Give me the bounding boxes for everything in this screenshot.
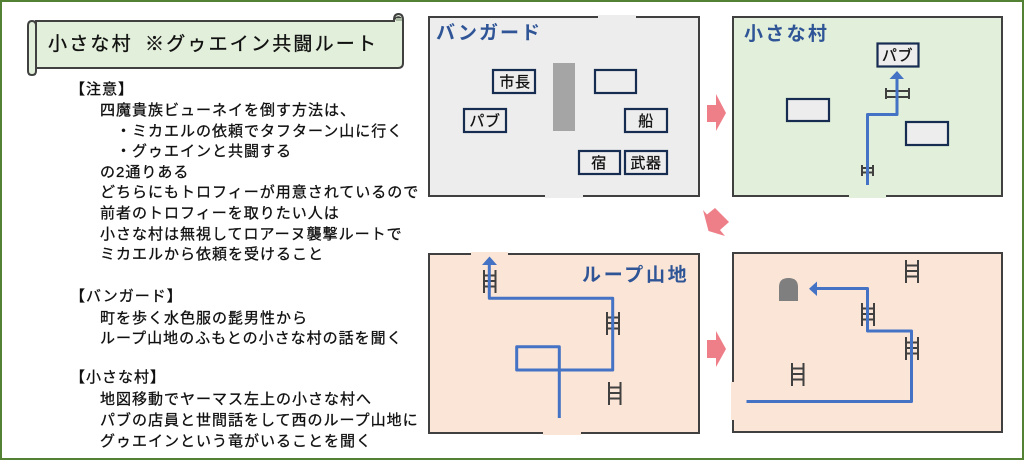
building: blank xyxy=(595,70,636,93)
ladder: top left xyxy=(484,270,496,293)
ladder: lower xyxy=(862,165,873,176)
text: caution body: の2通りある xyxy=(100,164,189,181)
route xyxy=(746,282,912,402)
ladder: right xyxy=(607,312,619,335)
text: caution body: どちらにもトロフィーが用意されているので xyxy=(100,184,419,201)
text: Vanguard body: 町を歩く水色服の髭男性から xyxy=(100,310,308,326)
panel: cave approach map xyxy=(731,253,1002,432)
text: caution body: 小さな村は無視してロアーヌ襲撃ルートで xyxy=(100,226,403,243)
building: mayor xyxy=(493,70,535,93)
title banner: 小さな村 xyxy=(48,34,133,55)
building: blank right xyxy=(906,122,948,145)
arrow: Vanguard to small village xyxy=(707,94,726,131)
arrow: small village to Loop mountains xyxy=(703,208,729,236)
building: weapons xyxy=(625,151,667,174)
panel: Vanguard town map xyxy=(429,15,699,198)
heading: Loop mountains: ループ山地 xyxy=(582,264,689,286)
text: caution body xyxy=(100,102,419,263)
heading: Vanguard: バンガード xyxy=(436,22,542,44)
title banner: ※グゥエイン共闘ルート xyxy=(145,33,378,55)
text: small village body: 地図移動でヤーマス左上の小さな村へ xyxy=(100,390,372,408)
central gray block xyxy=(553,63,575,131)
building: mayor: 市長 xyxy=(499,74,531,91)
text: small village body: グゥエインという竜がいることを聞く xyxy=(100,433,372,450)
building: blank left xyxy=(787,99,829,121)
text: caution body: ・グゥエインと共闘する xyxy=(116,143,292,160)
route xyxy=(482,256,613,418)
text block: notes xyxy=(70,81,419,450)
heading: small village: 小さな村 xyxy=(744,23,829,45)
heading: caution: 【注意】 xyxy=(70,81,134,98)
ladder: lower right xyxy=(609,382,620,405)
heading: small village: 【小さな村】 xyxy=(70,369,166,386)
ladder: middle xyxy=(862,303,874,326)
building: inn xyxy=(579,151,620,174)
building: pub xyxy=(878,44,918,66)
ladder: lower left xyxy=(792,363,804,386)
building: pub xyxy=(464,109,506,132)
text: caution body: ミカエルから依頼を受けること xyxy=(100,246,324,263)
arrow: Loop mountains to cave map xyxy=(707,331,726,367)
building: weapons: 武器 xyxy=(630,155,662,172)
route xyxy=(868,71,904,185)
text: Vanguard body xyxy=(100,310,403,347)
building: pub: パブ xyxy=(469,112,501,130)
ladder: upper xyxy=(886,88,909,99)
panel: Loop mountains map xyxy=(429,252,699,435)
text: Vanguard body: ループ山地のふもとの小さな村の話を聞く xyxy=(100,330,403,347)
panel: small village map xyxy=(733,17,1002,198)
text: caution body: 四魔貴族ビューネイを倒す方法は、 xyxy=(100,102,356,119)
building: inn: 宿 xyxy=(591,155,607,172)
ladder: right xyxy=(906,337,918,360)
text: caution body: 前者のトロフィーを取りたい人は xyxy=(100,205,340,222)
icon: cave entrance xyxy=(779,278,798,301)
text: small village body xyxy=(100,390,419,450)
building: ship xyxy=(625,109,667,132)
building: pub: パブ xyxy=(882,46,913,64)
ladder: top right xyxy=(906,260,918,283)
text: caution body: ・ミカエルの依頼でタフターン山に行く xyxy=(116,123,403,140)
text: small village body: パブの店員と世間話をして西のループ山地に xyxy=(100,412,419,429)
heading: Vanguard: 【バンガード】 xyxy=(70,288,183,304)
building: ship: 船 xyxy=(638,113,654,130)
